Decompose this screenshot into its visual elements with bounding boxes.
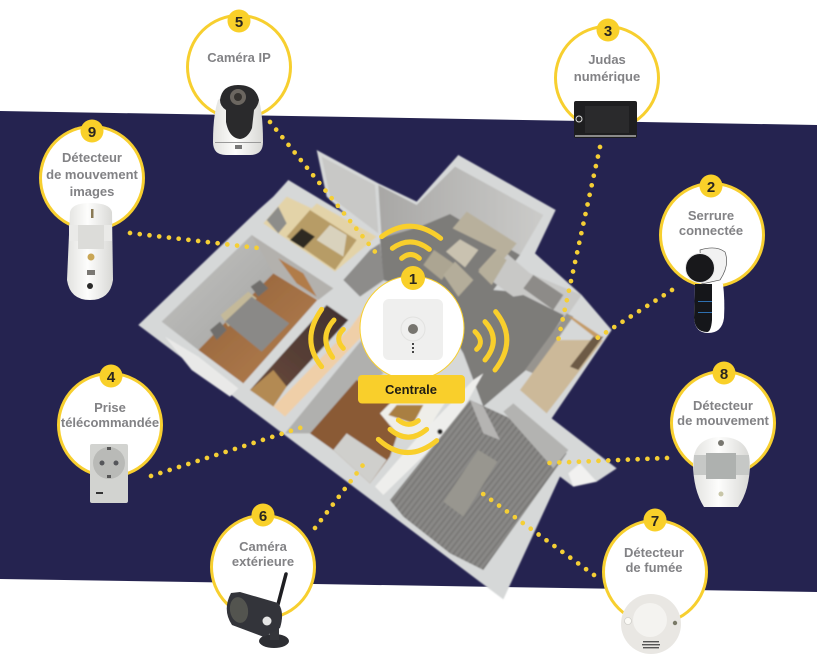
dotted connector: Détecteur de fumée — [479, 491, 594, 575]
callout 8: Détecteur de mouvement — [672, 362, 774, 507]
callout 6: Caméra extérieure — [212, 504, 314, 648]
right room — [525, 313, 573, 373]
second bedroom — [285, 340, 383, 433]
dotted connector: Prise télécommandée — [151, 426, 306, 476]
callout 9: Détecteur de mouvement images — [40, 120, 144, 300]
wall block with window — [493, 253, 582, 317]
callout 4: Prise télécommandée: Prise — [94, 400, 126, 415]
callout 7: Détecteur de fumée: 7 — [651, 513, 659, 530]
Centrale label: Centrale — [385, 382, 437, 397]
callout 6: Caméra extérieure: extérieure — [232, 554, 294, 569]
background band — [0, 111, 817, 592]
callout 5: Caméra IP — [188, 10, 290, 155]
callout 2: Serrure connectée — [660, 174, 764, 333]
callout 8: Détecteur de mouvement: de mouvement — [677, 413, 770, 428]
hall — [250, 305, 348, 390]
callout 3: Judas numérique: Judas — [588, 52, 626, 67]
callout 4: Prise télécommandée — [58, 364, 162, 503]
callout 5: Caméra IP: 5 — [235, 14, 243, 31]
callout 3: Judas numérique: numérique — [574, 69, 640, 84]
callout 4: Prise télécommandée: 4 — [107, 369, 116, 386]
callout 6: Caméra extérieure: Caméra — [239, 539, 288, 554]
wifi signal arcs — [311, 226, 507, 453]
callout 9: Détecteur de mouvement images: de mouvement — [46, 167, 139, 182]
bedroom — [162, 235, 278, 350]
tower walls — [378, 167, 543, 255]
icon: hub device — [383, 299, 443, 360]
icon: smoke detector — [621, 594, 681, 654]
living floor — [380, 214, 577, 407]
callout 2: Serrure connectée: connectée — [679, 223, 743, 238]
icon: outdoor camera — [227, 574, 289, 648]
icon: camera motion detector — [67, 203, 113, 300]
sofa — [453, 212, 517, 272]
callout 7: Détecteur de fumée: Détecteur — [624, 545, 684, 560]
icon: IP camera — [213, 85, 263, 155]
callout 9: Détecteur de mouvement images: images — [70, 184, 114, 199]
dotted connector: Caméra IP — [270, 122, 376, 253]
callout 3: Judas numérique: 3 — [604, 23, 612, 40]
number badge 1: 1 — [409, 271, 417, 288]
dotted connector: Détecteur de mouvement images — [130, 233, 258, 248]
callout 7: Détecteur de fumée: de fumée — [625, 560, 683, 575]
closet shelves — [343, 243, 384, 297]
hub circle — [360, 276, 464, 380]
icon: motion detector — [693, 437, 750, 507]
floor plan — [138, 150, 617, 599]
callout 6: Caméra extérieure: 6 — [259, 508, 267, 525]
dotted connector: Détecteur de mouvement — [548, 458, 667, 463]
icon: smart plug — [90, 444, 128, 503]
icon: digital door viewer — [574, 101, 637, 138]
callout 5: Caméra IP: Caméra IP — [207, 50, 271, 65]
callout 7: Détecteur de fumée — [604, 508, 706, 654]
callout 9: Détecteur de mouvement images: Détecteur — [62, 150, 122, 165]
callout 8: Détecteur de mouvement: 8 — [720, 366, 728, 383]
icon: connected lock — [686, 248, 727, 333]
bed — [221, 292, 257, 327]
callout 2: Serrure connectée: Serrure — [688, 208, 734, 223]
central hub: Centrale — [358, 266, 465, 404]
callout 9: Détecteur de mouvement images: 9 — [88, 124, 96, 141]
dotted connector: Caméra extérieure — [315, 465, 363, 528]
dotted connector: Judas numérique — [558, 147, 600, 341]
dotted connector: Serrure connectée — [591, 290, 672, 342]
callout 4: Prise télécommandée: télécommandée — [61, 415, 159, 430]
callout 2: Serrure connectée: 2 — [707, 179, 715, 196]
callout 3: Judas numérique — [556, 18, 658, 138]
callout 8: Détecteur de mouvement: Détecteur — [693, 398, 753, 413]
kitchen floor — [390, 400, 567, 570]
bath — [263, 197, 377, 272]
